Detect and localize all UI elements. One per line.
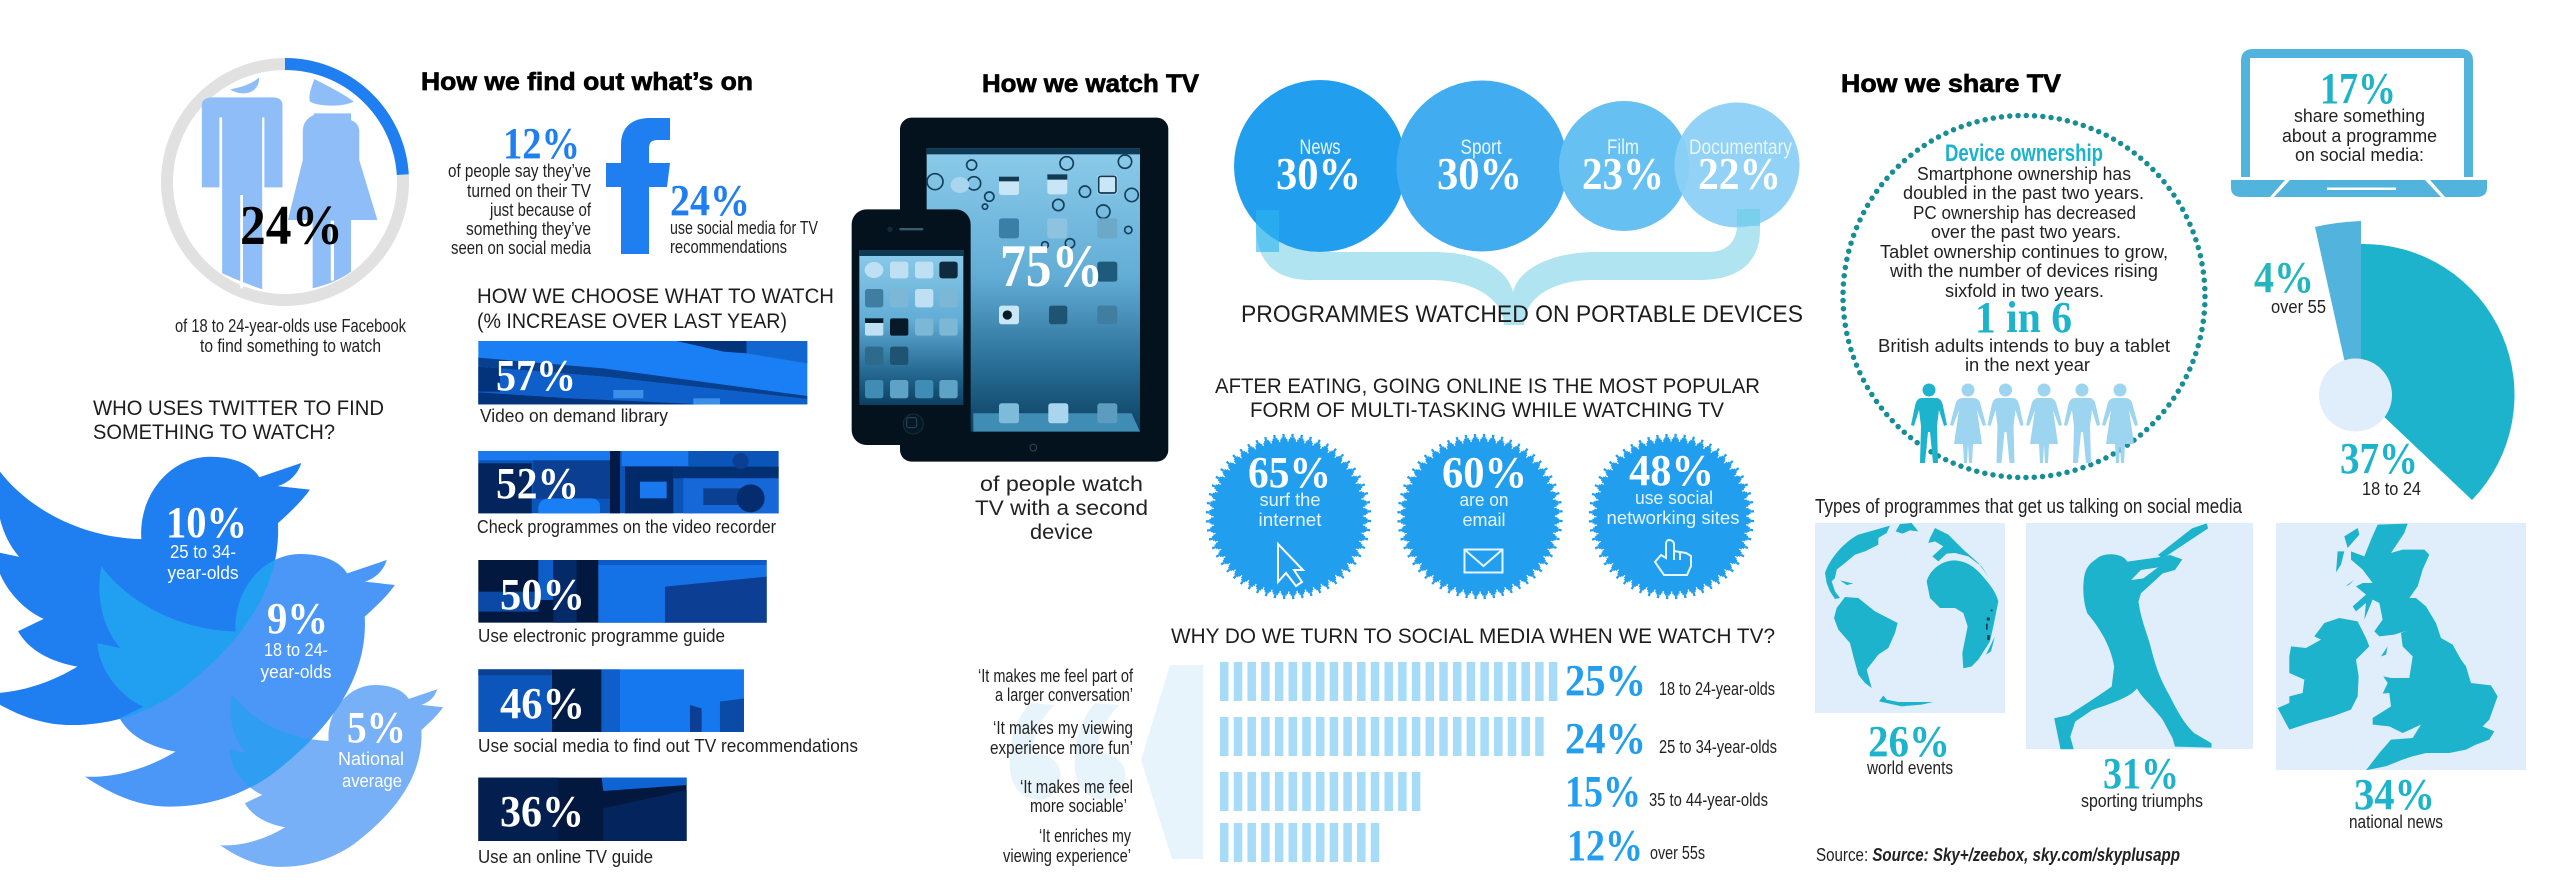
quotes: viewing experience’: [1003, 846, 1131, 866]
badge: 48% social networking: use social: [1635, 488, 1713, 508]
text: 24% description: use social media for TV: [670, 218, 818, 238]
panel: sporting triumphs: [2026, 523, 2253, 749]
bar: 46% use social media: [478, 669, 858, 756]
icon: man and woman figures: [202, 77, 377, 289]
bar: 52% check programmes on the video recorder: 52%: [496, 459, 579, 508]
stat: 31% sporting triumphs: sporting triumphs: [2081, 791, 2203, 811]
stat: 4% over 55: 4%: [2254, 253, 2314, 302]
heading: how we choose what to watch: (% INCREASE OVER LAST YEAR): [477, 310, 787, 333]
text: ownership trends: over the past two years.: [1931, 222, 2121, 242]
bubble: sport: [1396, 80, 1568, 252]
text: 12% description: something they’ve: [466, 219, 591, 239]
badge: 65% surf the internet: [1208, 436, 1370, 598]
bar: 36% use an online tv guide: [478, 778, 687, 867]
panel: twitter birds: [0, 457, 443, 867]
text: 12% description: just because of: [489, 200, 592, 220]
text: 12% description: of people say they’ve: [448, 161, 591, 181]
caption: second device: of people watch: [980, 473, 1143, 496]
heading: device ownership: Device ownership: [1945, 140, 2103, 167]
text: 24% description: [670, 218, 818, 257]
chart: 37% slice: [2361, 244, 2515, 500]
stat: 9%: 9%: [267, 594, 328, 643]
overlap: birds two and three: [229, 694, 343, 788]
stat: 26% world events: 26%: [1868, 717, 1950, 766]
caption: facebook ring: to find something to watch: [200, 336, 381, 356]
icon: six people: [1911, 384, 2138, 463]
stats: age groups: 25 to 34-year-olds: [1659, 737, 1777, 757]
panel: laptop 17%: [2231, 49, 2487, 197]
stat: 10%: year-olds: [168, 563, 238, 583]
stat: 5%: average: [342, 771, 402, 791]
label: sport 30%: Sport: [1460, 136, 1502, 159]
icon: ring chart 24%: [167, 64, 403, 300]
decorative dotted circle: [1843, 116, 2205, 478]
label: film 23%: 23%: [1582, 148, 1664, 199]
chart: 4% slice: [2315, 221, 2361, 395]
text: share something: [2282, 106, 2437, 165]
label: documentary 22%: 22%: [1698, 148, 1781, 199]
heading: who uses twitter: WHO USES TWITTER TO FIND: [93, 397, 384, 420]
stats: age groups: 15%: [1565, 767, 1641, 816]
stripe bars: 25, 24, 15, 12: [1224, 662, 1553, 862]
caption: second device: device: [1030, 521, 1093, 544]
stat: 31% sporting triumphs: [2081, 749, 2203, 811]
stats: age groups: 18 to 24-year-olds: [1659, 679, 1775, 699]
icon: laptop: [2231, 49, 2487, 197]
quotes: more sociable’: [1030, 796, 1127, 816]
stats: age groups: 12%: [1567, 821, 1643, 870]
quotes: ‘It makes me feel: [1020, 777, 1133, 797]
badge: 60% on email: 60%: [1442, 448, 1527, 497]
bar: 50% use electronic programme guide: [478, 560, 767, 646]
stat: 10%: 25 to 34-: [170, 542, 236, 562]
stat: 1 in 6: 1 in 6: [1975, 293, 2072, 342]
heading: how we find out what's on: How we find out what’s on: [421, 68, 753, 96]
text: 12% description: [448, 161, 592, 258]
stat: 37% 18 to 24: 37%: [2340, 434, 2418, 483]
chart: hub: [2319, 358, 2392, 432]
badge: 65% surf the internet: internet: [1258, 510, 1322, 530]
heading: how we choose what to watch: HOW WE CHOOSE WHAT TO WATCH: [477, 285, 834, 308]
bar: 46% use social media: Use social media to find out TV recommendations: [478, 736, 858, 756]
heading: types of programmes: Types of programmes that get us talking on social media: [1815, 496, 2243, 518]
icon: pointing hand: [1655, 540, 1691, 575]
panel: types of programmes: [1815, 496, 2526, 832]
bar: 46% use social media: 46%: [500, 679, 585, 728]
heading: who uses twitter: [93, 397, 384, 444]
stat: 9%: 18 to 24-: [264, 640, 328, 660]
stat: 4% over 55: over 55: [2271, 297, 2326, 317]
label: documentary 22%: Documentary: [1689, 136, 1792, 159]
heading: how we choose what to watch: [477, 285, 834, 333]
source line: Source: Source: Sky+/zeebox, sky.com/skyplusapp: [1816, 845, 2180, 865]
stat: 31% sporting triumphs: 31%: [2103, 749, 2179, 798]
heading: after eating: FORM OF MULTI-TASKING WHILE WATCHING TV: [1250, 399, 1724, 422]
stat: 9%: [260, 594, 332, 682]
quotes: ‘It enriches my: [1039, 826, 1131, 846]
quotes: ‘It makes my viewing: [993, 718, 1133, 738]
text: 12% description: seen on social media: [451, 238, 592, 258]
quotes: experience more fun’: [990, 738, 1133, 758]
bar: 52% check programmes on the video recorder: [477, 451, 779, 537]
panel: national news: [2276, 523, 2526, 770]
quotes: [978, 666, 1134, 866]
icon: bird 18 to 24: [85, 554, 395, 807]
panel: second device: [852, 118, 1168, 544]
badge: 48% social networking: [1590, 436, 1752, 598]
label: news 30%: News: [1300, 136, 1340, 159]
bar: 36% use an online tv guide: Use an online TV guide: [478, 847, 653, 867]
stats: age groups: 25%: [1565, 656, 1646, 705]
overlap: birds one and two: [98, 560, 276, 719]
text: share something: share something: [2294, 106, 2425, 126]
bar: 57% video on demand library: [478, 341, 807, 426]
stat: 9%: year-olds: [260, 662, 332, 682]
text: ownership trends: [1880, 164, 2168, 301]
text: 24% description: recommendations: [670, 237, 787, 257]
stat: 5%: [338, 703, 406, 791]
heading: who uses twitter: SOMETHING TO WATCH?: [93, 421, 335, 444]
icon: tablet: [900, 118, 1168, 462]
bubble: film: [1559, 101, 1689, 231]
badge: 48% social networking: 48%: [1629, 446, 1714, 495]
stat: 24%: 24%: [240, 195, 343, 257]
text: british adults: [1878, 336, 2170, 375]
text: ownership trends: PC ownership has decreased: [1913, 203, 2136, 223]
text: ownership trends: sixfold in two years.: [1945, 281, 2104, 301]
panel: sharing by age pie: [2254, 221, 2515, 500]
icon: bird national average: [220, 685, 443, 867]
stat: 5%: 5%: [347, 703, 406, 752]
badge: 60% on email: are on: [1460, 490, 1508, 510]
heading: how we share tv: How we share TV: [1841, 70, 2061, 98]
stats: age groups: 24%: [1565, 714, 1646, 763]
caption: second device: [975, 473, 1148, 544]
panel: choose what to watch bars: [477, 341, 858, 867]
text: ownership trends: with the number of devices rising: [1889, 261, 2158, 281]
icon: phone: [852, 209, 971, 445]
panel: why social media: [978, 625, 1777, 870]
badge: 60% on email: [1399, 436, 1561, 598]
panel: facebook age ring: [167, 64, 407, 356]
badge: 65% surf the internet: surf the: [1260, 490, 1320, 510]
text: ownership trends: Tablet ownership continues to grow,: [1880, 242, 2168, 262]
text: british adults: British adults intends to buy a tablet: [1878, 336, 2170, 356]
bar: 57% video on demand library: Video on demand library: [480, 406, 668, 426]
label: news 30%: 30%: [1276, 148, 1361, 199]
decorative brace: [1256, 209, 1760, 325]
icon: bird 25 to 34: [0, 457, 310, 725]
stat: 5%: National: [338, 749, 404, 769]
heading: why do we turn to social media: WHY DO WE TURN TO SOCIAL MEDIA WHEN WE WATCH TV?: [1171, 625, 1775, 648]
badge: 65% surf the internet: 65%: [1248, 448, 1331, 497]
caption: second device: TV with a second: [975, 497, 1148, 520]
stat: 34% national news: national news: [2349, 812, 2443, 832]
bubble: news: [1234, 80, 1406, 252]
stat: 37% 18 to 24: 18 to 24: [2362, 479, 2421, 499]
icon: envelope: [1464, 550, 1502, 572]
panel: facebook stats: [448, 118, 818, 258]
panel: programmes on portable devices: [1234, 80, 1803, 328]
stat: 17%: 17%: [2320, 64, 2396, 113]
panel: device ownership: [1843, 116, 2205, 478]
heading: how we watch tv: How we watch TV: [982, 70, 1199, 98]
stats: age groups: over 55s: [1650, 843, 1705, 863]
icon: cursor: [1278, 544, 1303, 586]
text: ownership trends: doubled in the past two years.: [1903, 183, 2144, 203]
text: share something: about a programme: [2282, 126, 2437, 146]
text: 12% description: turned on their TV: [467, 181, 591, 201]
stat: 75%: 75%: [1000, 233, 1103, 299]
heading: programmes watched on portable devices: PROGRAMMES WATCHED ON PORTABLE DEVICES: [1241, 301, 1803, 328]
bar: 57% video on demand library: 57%: [496, 351, 576, 400]
text: share something: on social media:: [2295, 145, 2424, 165]
bar: 52% check programmes on the video recorder: Check programmes on the video recorder: [477, 517, 776, 537]
heading: after eating: [1215, 375, 1760, 422]
bar: 50% use electronic programme guide: Use electronic programme guide: [478, 626, 725, 646]
stats: age groups: 35 to 44-year-olds: [1649, 790, 1768, 810]
caption: facebook ring: of 18 to 24-year-olds use Facebook: [175, 316, 407, 336]
decorative: pale speech chevron and quote marks: [1010, 665, 1203, 859]
text: british adults: in the next year: [1965, 355, 2090, 375]
stats: age groups: [1565, 656, 1777, 870]
label: sport 30%: 30%: [1437, 148, 1522, 199]
text: ownership trends: Smartphone ownership has: [1917, 164, 2131, 184]
icon: facebook f: [606, 118, 670, 254]
panel: multi-tasking: [1208, 375, 1760, 598]
stat: 24% use social media: 24%: [670, 176, 750, 225]
bar: 36% use an online tv guide: 36%: [500, 787, 584, 836]
label: film 23%: Film: [1607, 136, 1639, 159]
quotes: ‘It makes me feel part of: [978, 666, 1134, 686]
stat: 26% world events: world events: [1866, 758, 1953, 778]
bubble: documentary: [1674, 102, 1800, 228]
caption: facebook ring: [175, 316, 407, 356]
stat: 12%: 12%: [503, 119, 580, 168]
badge: 60% on email: email: [1462, 510, 1506, 530]
stat: 34% national news: 34%: [2354, 770, 2435, 819]
bar: 50% use electronic programme guide: 50%: [500, 570, 585, 619]
quotes: a larger conversation’: [995, 685, 1133, 705]
heading: after eating: AFTER EATING, GOING ONLINE IS THE MOST POPULAR: [1215, 375, 1760, 398]
stat: 10%: 10%: [166, 498, 247, 547]
badge: 48% social networking: networking sites: [1606, 508, 1740, 528]
panel: world events: [1815, 523, 2005, 713]
stat: 10%: [166, 498, 247, 583]
